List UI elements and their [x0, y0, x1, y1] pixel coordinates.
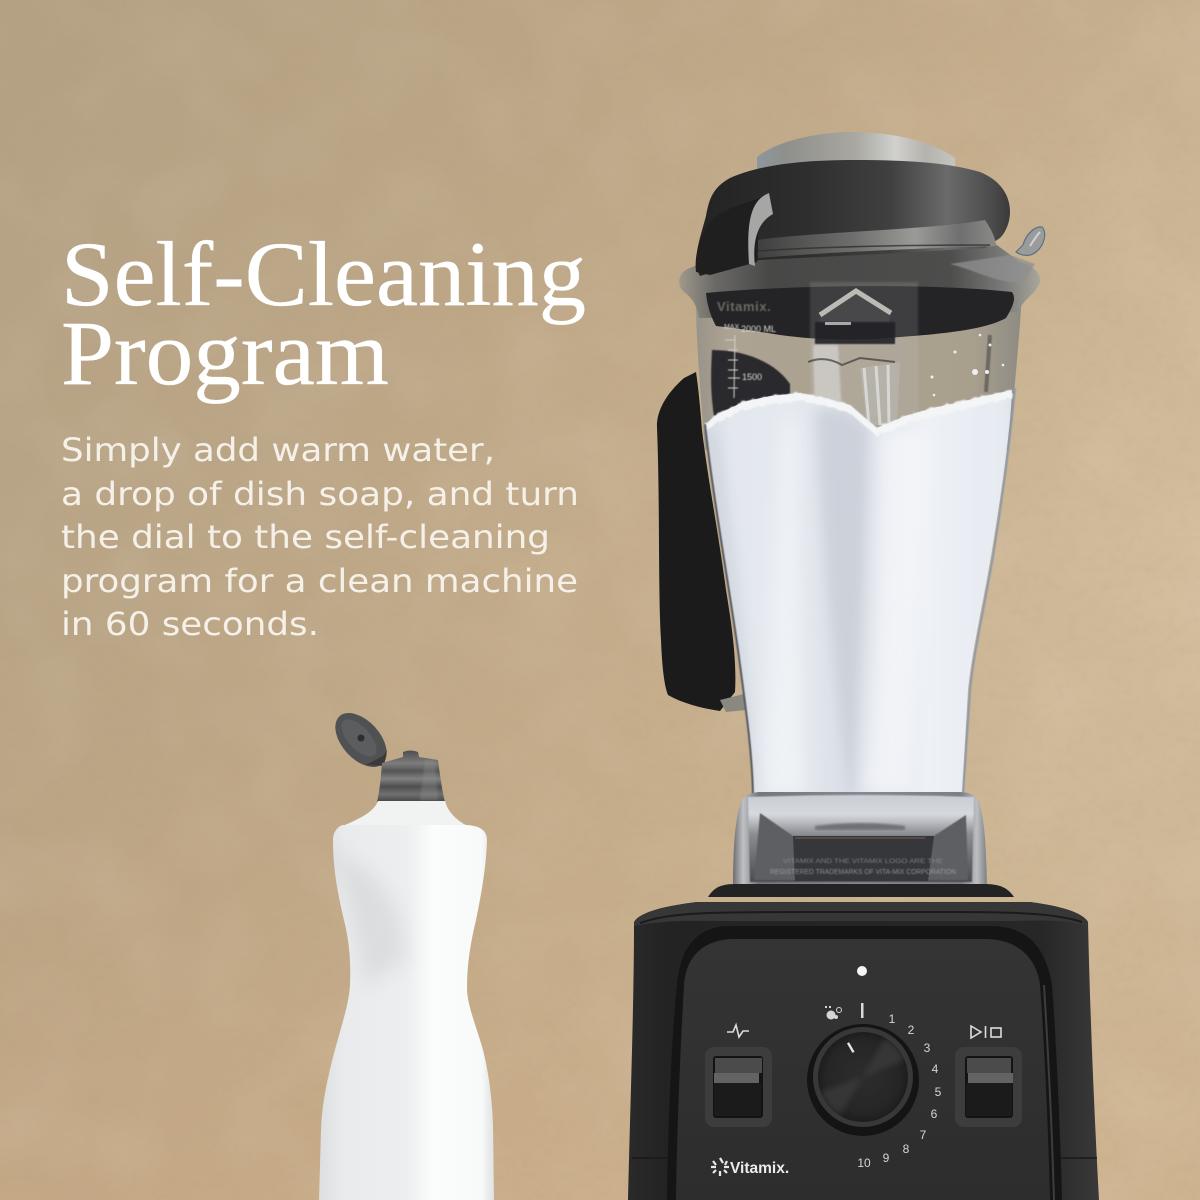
jar inner dark band — [706, 286, 1014, 339]
lid plug — [757, 132, 955, 170]
body text: a drop of dish soap, and turn — [61, 475, 579, 513]
blending liquid — [706, 390, 1012, 793]
jar upper glass — [696, 295, 1022, 450]
jar markings — [717, 299, 990, 398]
pulse switch — [705, 1047, 772, 1127]
lid body — [696, 160, 1010, 276]
icon: pulse — [727, 1025, 749, 1037]
base rim — [634, 902, 1088, 926]
control panel — [676, 939, 1050, 1200]
spout droplet — [1016, 227, 1045, 255]
jar markings: Vitamix. — [717, 299, 771, 314]
centre column in glass — [808, 282, 918, 425]
foam line — [705, 390, 1012, 436]
off tick — [861, 1003, 864, 1018]
bottle cap hinge lid — [325, 704, 397, 776]
jar handle — [657, 372, 746, 712]
title: Program — [61, 302, 389, 404]
motor base — [628, 884, 1099, 1200]
collar engraved lines — [770, 858, 956, 876]
handle strut — [720, 694, 746, 712]
speed numbers: 3 — [924, 1041, 931, 1055]
collar blade well — [754, 813, 968, 880]
liquid vertical shading — [816, 410, 868, 795]
speed numbers: 7 — [920, 1128, 927, 1142]
lid flange — [758, 220, 996, 258]
collar engraved lines: REGISTERED TRADEMARKS OF VITA-MIX CORPORATION — [770, 867, 956, 876]
start stop switch — [955, 1047, 1022, 1127]
water droplets — [930, 334, 1004, 396]
jar glass edges — [705, 388, 1015, 795]
base body — [628, 902, 1099, 1200]
jar rim — [679, 240, 1040, 318]
bottle neck cap — [377, 750, 445, 802]
title — [61, 223, 586, 404]
jar markings: MAX — [724, 324, 740, 331]
body text: the dial to the self-cleaning — [61, 518, 550, 556]
body text: program for a clean machine — [61, 562, 578, 600]
speed numbers: 8 — [903, 1142, 910, 1156]
speed numbers: 5 — [935, 1085, 942, 1099]
collar engraved lines: VITAMIX AND THE VITAMIX LOGO ARE THE — [783, 858, 944, 865]
speed numbers: 10 — [857, 1156, 871, 1170]
vitamix logo — [711, 1158, 789, 1177]
speed numbers: 6 — [931, 1107, 938, 1121]
lid curved highlight — [748, 193, 773, 266]
vitamix logo: Vitamix. — [730, 1160, 789, 1177]
speed numbers: 9 — [883, 1151, 890, 1165]
speed numbers — [857, 1012, 942, 1170]
handle seen through glass — [711, 350, 790, 416]
control panel bezel — [667, 926, 1062, 1200]
body text: in 60 seconds. — [61, 605, 319, 643]
jar markings: 1500 — [742, 372, 762, 382]
splash on rim — [950, 255, 1035, 282]
blender — [628, 132, 1099, 1200]
bottle body — [319, 825, 494, 1200]
speed numbers: 4 — [932, 1062, 939, 1076]
lid tab — [696, 198, 760, 275]
icon: self-clean bubbles — [825, 1006, 842, 1020]
jar markings: 2000 ML — [741, 324, 776, 334]
body text — [61, 431, 579, 643]
soap bottle — [319, 704, 494, 1200]
base pad — [708, 884, 1014, 897]
title: Self-Cleaning — [61, 223, 586, 325]
base seam — [632, 1157, 1097, 1159]
jar collar — [733, 792, 987, 885]
speed numbers: 1 — [889, 1012, 896, 1026]
bottle shading — [341, 860, 404, 977]
body text: Simply add warm water, — [61, 431, 495, 469]
speed numbers: 2 — [908, 1023, 915, 1037]
icon: start stop — [971, 1026, 1001, 1038]
power led — [857, 966, 867, 976]
speed dial — [807, 1024, 919, 1136]
bottle shoulder — [338, 801, 472, 828]
